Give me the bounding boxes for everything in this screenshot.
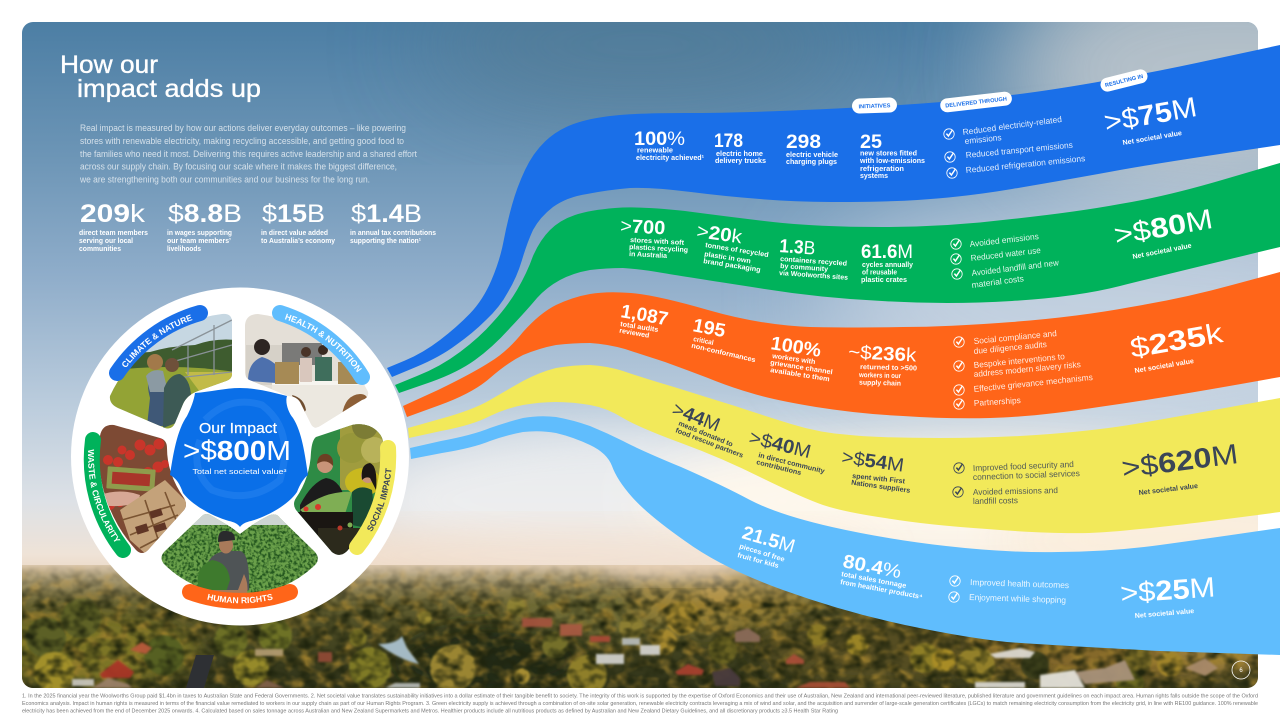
category pill: human rights <box>182 584 298 609</box>
intro paragraph: Real impact is measured by how our actions deliver everyday outcomes – like powering <box>80 122 406 133</box>
column tag: delivered through <box>939 91 1013 113</box>
result: waste >$80M: Net societal value <box>1132 243 1192 261</box>
stat: $1.4B tax: $1.4B <box>351 200 422 228</box>
result: human rights $235k: $235k <box>1128 317 1226 364</box>
stat: 178 electric trucks <box>714 131 766 165</box>
stat: 1,087 audits: total audits <box>620 321 659 334</box>
benefits list: climate <box>944 114 1086 178</box>
photo: human rights, farmer in a crop field <box>162 514 318 593</box>
stat: >700 stores: in Australia <box>629 251 667 260</box>
stat: 195 non-conformances: 195 <box>691 315 727 342</box>
stat: $8.8B wages: our team members’ <box>167 238 231 245</box>
benefits list: human rights: Effective grievance mechanisms <box>973 372 1093 394</box>
stat: $1.4B tax: supporting the nation¹ <box>350 238 422 245</box>
stat: $15B value added: $15B <box>262 200 325 228</box>
stat: 25 low-emissions stores <box>859 132 925 180</box>
benefits list: social: Improved food security and <box>973 459 1074 473</box>
category pill: waste and circularity: WASTE & CIRCULARITY <box>88 449 120 542</box>
photo: waste and circularity, tomatoes and crates <box>100 424 186 553</box>
stat: 25 low-emissions stores: systems <box>860 173 888 180</box>
benefits list: climate: Reduced transport emissions <box>965 140 1073 160</box>
column tag: delivered through: DELIVERED THROUGH <box>945 97 1007 109</box>
stat: $15B value added: to Australia’s economy <box>261 238 335 245</box>
title: How our <box>60 51 158 79</box>
ribbon: blue climate and nature <box>387 45 1280 377</box>
stat: >$40M contributions: >$40M <box>747 427 813 463</box>
stat: >700 stores: plastics recycling <box>629 244 688 254</box>
stat: 61.6M crates: 61.6M <box>861 242 913 263</box>
stat: >20k tonnes: tonnes of recycled <box>705 242 769 259</box>
stat: 100% grievance channel: workers with <box>771 353 816 366</box>
result: social >$620M: Net societal value <box>1138 483 1198 497</box>
category pill: social impact: SOCIAL IMPACT <box>367 468 392 532</box>
benefits list: human rights: Bespoke interventions to <box>973 351 1065 370</box>
waste ribbon content <box>620 203 1215 290</box>
stat: 100% grievance channel: available to them <box>770 367 830 383</box>
stat: ~$236k returned: ~$236k <box>848 342 917 367</box>
stat: >$54M First Nations <box>840 447 911 495</box>
stat: 298 charging plugs: electric vehicle <box>786 152 838 159</box>
stat: 1,087 audits: reviewed <box>619 328 650 340</box>
intro paragraph: we are strengthening both our communities and our business for the long run. <box>79 174 370 184</box>
stat: >700 stores: >700 <box>620 216 666 239</box>
stat: 209k team members: 209 k <box>80 200 146 228</box>
headline stats row <box>79 200 436 253</box>
stat: >$54M First Nations: >$54M <box>840 447 905 477</box>
stat: 1.3B containers <box>779 236 848 282</box>
stat: 209k team members: serving our local <box>79 238 133 245</box>
result: waste >$80M: >$80M <box>1112 203 1215 251</box>
stat: 195 non-conformances: critical <box>693 336 714 347</box>
stat: 178 electric trucks: delivery trucks <box>715 158 766 165</box>
intro paragraph: across our supply chain. By focusing our scale where it makes the biggest difference, <box>80 160 397 172</box>
human rights ribbon content <box>619 301 1226 409</box>
stat: 21.5M fruit <box>736 523 797 570</box>
stat: >$40M contributions <box>747 427 825 477</box>
stat: 298 charging plugs <box>786 132 838 166</box>
stat: 25 low-emissions stores: refrigeration <box>860 166 904 173</box>
ribbon: orange human rights <box>403 272 1280 418</box>
category pill: health and nutrition <box>272 305 370 385</box>
stat: 21.5M fruit: fruit for kids <box>736 552 779 570</box>
stat: $8.8B wages: in wages supporting <box>167 230 232 237</box>
stat: >$40M contributions: contributions <box>756 459 802 477</box>
stat: >700 stores <box>620 216 688 260</box>
stat: 100% grievance channel: grievance channel <box>770 360 833 376</box>
stat: 209k team members: communities <box>79 246 121 253</box>
stat: $15B value added <box>261 200 335 245</box>
stat: >44M meals <box>669 399 744 460</box>
title: impact adds up <box>77 75 261 103</box>
benefits list: human rights <box>954 328 1093 409</box>
footnotes <box>22 694 1258 714</box>
title <box>60 51 261 103</box>
stat: 209k team members: direct team members <box>79 230 148 237</box>
stat: 80.4% tonnage: 80.4% <box>841 551 903 583</box>
result: social >$620M: >$620M <box>1120 438 1240 484</box>
centre total value: >$800M <box>183 435 291 466</box>
stat: 100% renewable electricity: renewable <box>637 148 673 154</box>
result: climate >$75M: Net societal value <box>1122 130 1183 147</box>
stat: 100% renewable electricity: electricity achieved¹ <box>636 155 705 162</box>
benefits list: social: Avoided emissions and <box>973 485 1058 497</box>
stat: 1.3B containers: by community <box>780 263 828 273</box>
column tag: initiatives <box>852 97 897 114</box>
photo: climate and nature, farmers in a field <box>110 314 232 428</box>
stat: $15B value added: in direct value added <box>261 230 328 237</box>
footnotes: electricity has been achieved from the end of December 2025 onwards. 4. Calculated based on sales tonnage across Australian and New Zealand Supermarkets and Metros. Healthier products include all nutritious products as defined by Australian and New Zealand Dietary Guidelines, and all discretionary products ≥3.5 Health Star Rating <box>22 708 838 714</box>
stat: $8.8B wages <box>167 200 242 253</box>
page number badge: 6 <box>1239 668 1243 674</box>
category pill: social impact <box>349 440 396 555</box>
benefits list: social <box>953 459 1080 506</box>
stat: >20k tonnes: >20k <box>695 221 744 248</box>
category pill: health and nutrition: HEALTH & NUTRITION <box>285 314 362 372</box>
stat: 178 electric trucks: electric home <box>716 151 763 158</box>
photo: social impact, volunteers with produce <box>294 424 383 555</box>
benefits list: waste: Avoided landfill and new <box>971 257 1060 278</box>
health ribbon content <box>736 523 1216 620</box>
stat: 61.6M crates: plastic crates <box>861 277 907 284</box>
column tag: initiatives: INITIATIVES <box>858 103 891 110</box>
benefits list: waste <box>951 231 1060 290</box>
stat: ~$236k returned <box>848 342 917 388</box>
impact wheel <box>71 288 409 626</box>
benefits list: health: Improved health outcomes <box>970 577 1069 590</box>
stat: >$54M First Nations: Nations suppliers <box>851 480 911 495</box>
stat: 21.5M fruit: 21.5M <box>740 523 797 558</box>
benefits list: waste: material costs <box>971 273 1024 290</box>
stat: 209k team members <box>79 200 148 253</box>
stat: $8.8B wages: $8.8B <box>168 200 242 228</box>
stat: 80.4% tonnage <box>840 551 923 601</box>
result: human rights $235k: Net societal value <box>1134 358 1195 375</box>
stat: 100% renewable electricity <box>634 129 705 162</box>
footnotes: 1. In the 2025 financial year the Woolworths Group paid $1.4bn in taxes to Australian State and Federal Governments. 2. Net societal value translates sustainability initiatives into a dollar estimate of their tangible benefit to society. The integrity of this work is supported by the expertise of Oxford Economics and their use of Australian, New Zealand and international peer-reviewed literature, published literature and government guidelines on each impact area. Human rights falls outside the scope of the Oxford <box>22 694 1258 700</box>
footnotes: Economics analysis. Impact in human rights is measured in terms of the financial value remediated to workers in our supply chain as part of our Human Rights Program. 3. Green electricity supply is achieved through a combination of on-site solar generation, renewable electricity contracts leveraging a mix of wind and solar, and the acquisition and surrender of large-scale generation certificates (LGCs) to match remaining electricity consumption from the electricity grid, in line with RE100 guidance. 100% renewable <box>22 701 1258 707</box>
stat: 1.3B containers: via Woolworths sites <box>779 270 848 282</box>
stat: 1,087 audits: 1,087 <box>619 301 670 330</box>
benefits list: climate: emissions <box>964 132 1002 146</box>
stat: >20k tonnes <box>695 221 769 274</box>
stat: $1.4B tax: in annual tax contributions <box>350 230 436 237</box>
benefits list: social: connection to social services <box>973 468 1080 482</box>
climate ribbon content <box>634 91 1199 180</box>
benefits list: human rights: Social compliance and <box>973 328 1057 346</box>
ribbon: yellow social impact <box>408 365 1280 533</box>
result: climate >$75M: >$75M <box>1102 91 1199 138</box>
centre label: Our Impact <box>199 421 277 437</box>
stat: 21.5M fruit: pieces of free <box>738 543 786 564</box>
benefits list: human rights: address modern slavery risks <box>973 359 1081 379</box>
stat: 100% renewable electricity: 100% <box>634 129 685 150</box>
benefits list: human rights: Partnerships <box>973 395 1021 408</box>
photo: health and nutrition, family at kitchen bench <box>245 314 368 428</box>
ribbon: light blue health and nutrition <box>410 416 1280 655</box>
category pill: human rights: HUMAN RIGHTS <box>207 594 273 604</box>
category pill: waste and circularity <box>84 432 131 558</box>
centre caption: Total net societal value³ <box>192 467 287 476</box>
stat: ~$236k returned: returned to >500 <box>860 364 917 372</box>
stat: >20k tonnes: brand packaging <box>703 258 761 274</box>
stat: ~$236k returned: supply chain <box>859 380 901 388</box>
result: health >$25M: Net societal value <box>1135 608 1195 620</box>
stat: >44M meals: meals donated to <box>677 420 734 449</box>
benefits list: health <box>949 576 1069 605</box>
benefits list: waste: Avoided emissions <box>969 231 1039 249</box>
stat: 195 non-conformances <box>691 315 756 364</box>
benefits list: waste: Reduced water use <box>970 245 1042 263</box>
stat: >44M meals: >44M <box>669 399 723 436</box>
social impact ribbon content <box>669 399 1240 506</box>
stat: >20k tonnes: plastic in own <box>704 251 751 265</box>
ribbon: green waste and circularity <box>395 163 1280 393</box>
stat: 80.4% tonnage: from healthier products⁴ <box>840 579 923 601</box>
benefits list: human rights: due diligence audits <box>973 339 1047 356</box>
stat: 1.3B containers: containers recycled <box>780 256 847 268</box>
stat: 25 low-emissions stores: 25 <box>860 132 882 153</box>
column tag: resulting in <box>1099 68 1149 93</box>
stat: $1.4B tax <box>350 200 436 245</box>
stat: 1.3B containers: 1.3B <box>779 236 816 259</box>
stat: 61.6M crates <box>861 242 913 284</box>
stat: 61.6M crates: cycles annually <box>862 262 913 269</box>
stat: 298 charging plugs: 298 <box>786 132 821 153</box>
stat: 178 electric trucks: 178 <box>714 131 743 152</box>
intro paragraph: the families who need it most. Delivering this requires active leadership and a shared effort <box>80 148 417 159</box>
benefits list: climate: Reduced electricity-related <box>962 114 1063 137</box>
stat: 298 charging plugs: charging plugs <box>786 159 837 166</box>
centre badge: our impact total <box>170 388 308 527</box>
stat: 195 non-conformances: non-conformances <box>691 343 756 364</box>
benefits list: climate: Reduced refrigeration emissions <box>965 153 1086 175</box>
intro paragraph: stores with renewable electricity, making recycling accessible, and getting good food to <box>80 135 404 146</box>
page number badge <box>1232 661 1250 679</box>
stat: >44M meals: food rescue partners <box>674 427 744 460</box>
stat: 25 low-emissions stores: with low-emissions <box>859 158 925 165</box>
stat: >700 stores: stores with soft <box>630 237 685 247</box>
stat: >$40M contributions: in direct community <box>758 452 825 475</box>
stat: ~$236k returned: workers in our <box>858 372 901 380</box>
column tag: resulting in: RESULTING IN <box>1105 74 1144 89</box>
intro paragraph <box>79 122 417 184</box>
category pill: climate and nature <box>109 305 208 381</box>
benefits list: health: Enjoyment while shopping <box>969 592 1066 605</box>
benefits list: social: landfill costs <box>973 495 1018 506</box>
stat: 25 low-emissions stores: new stores fitted <box>860 150 917 158</box>
stat: 80.4% tonnage: total sales tonnage <box>841 571 907 590</box>
stat: 100% grievance channel <box>769 333 833 383</box>
stat: >$54M First Nations: spent with First <box>852 473 906 486</box>
stat: $8.8B wages: livelihoods <box>167 246 201 253</box>
result: health >$25M: >$25M <box>1119 571 1216 609</box>
stat: 100% grievance channel: 100% <box>769 333 823 362</box>
stat: 61.6M crates: of reusable <box>862 270 897 276</box>
category pill: climate and nature: CLIMATE & NATURE <box>122 314 192 367</box>
